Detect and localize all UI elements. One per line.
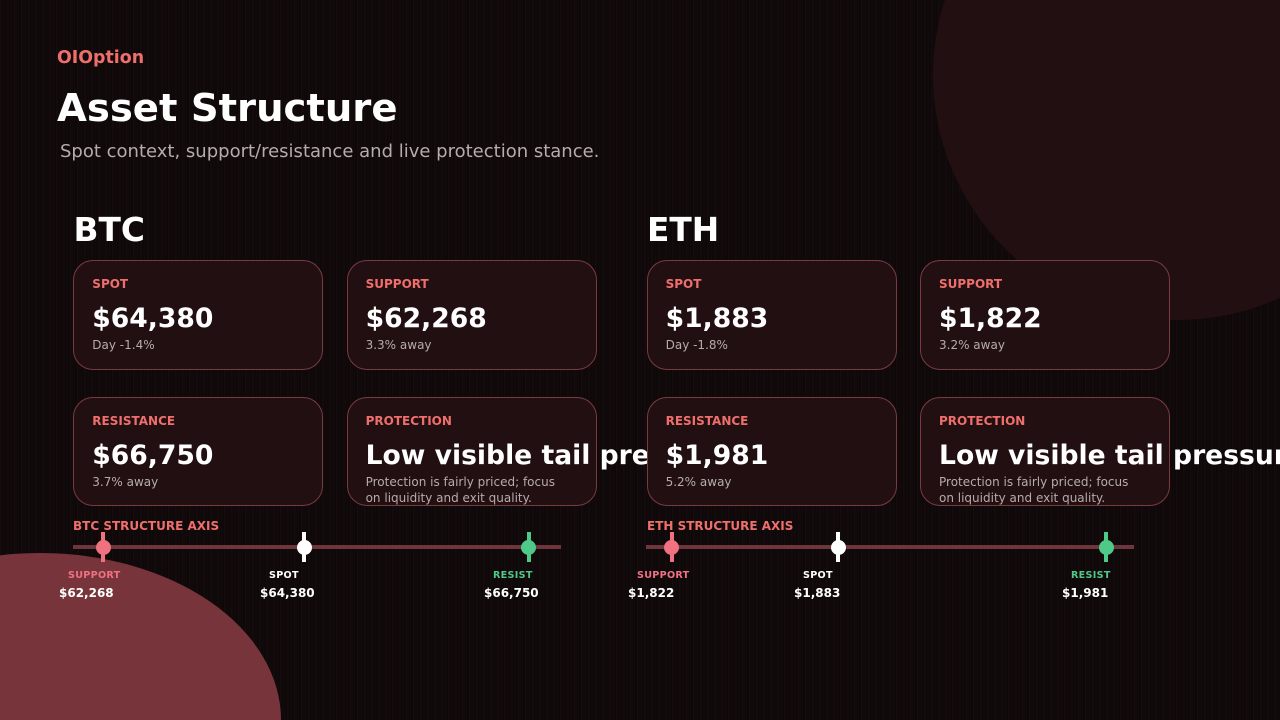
card: ETH protection: PROTECTION — [939, 414, 1025, 428]
card: BTC resistance: 3.7% away — [92, 475, 158, 489]
label: resist: RESIST — [493, 570, 533, 581]
card: ETH resistance: $1,981 — [666, 440, 768, 471]
marker: spot — [831, 532, 846, 562]
card: BTC spot — [73, 260, 323, 370]
card: ETH resistance: RESISTANCE — [666, 414, 748, 428]
brand label: OIOption — [57, 48, 144, 68]
subtitle: Spot context, support/resistance and live protection stance. — [60, 141, 599, 162]
card: ETH spot: Day -1.8% — [666, 338, 728, 352]
card: BTC protection: PROTECTION — [366, 414, 452, 428]
card: ETH spot: $1,883 — [666, 303, 768, 334]
value: resist: $66,750 — [484, 586, 539, 600]
title: Asset Structure — [57, 86, 398, 131]
decorative circle: top right — [933, 0, 1280, 320]
label: spot: SPOT — [803, 570, 833, 581]
heading: ETH: ETH — [647, 211, 719, 249]
value: spot: $1,883 — [794, 586, 840, 600]
marker: spot — [297, 532, 312, 562]
heading: BTC: BTC — [74, 211, 145, 249]
card: BTC spot: SPOT — [92, 277, 128, 291]
card: ETH spot: SPOT — [666, 277, 701, 291]
BTC structure axis — [59, 519, 561, 600]
marker: resist — [521, 532, 536, 562]
card: BTC resistance: RESISTANCE — [92, 414, 175, 428]
value: spot: $64,380 — [260, 586, 315, 600]
value: support: $62,268 — [59, 586, 114, 600]
card: BTC support: $62,268 — [366, 303, 487, 334]
marker: resist — [1099, 532, 1114, 562]
label: resist: RESIST — [1071, 570, 1111, 581]
card: ETH protection — [920, 397, 1170, 506]
axis title: BTC STRUCTURE AXIS — [73, 519, 219, 533]
card: BTC spot: $64,380 — [92, 303, 213, 334]
label: spot: SPOT — [269, 570, 299, 581]
card: ETH spot — [647, 260, 897, 370]
card: ETH support: $1,822 — [939, 303, 1042, 334]
card: BTC protection — [347, 397, 597, 506]
marker: support — [96, 532, 111, 562]
card: ETH support — [920, 260, 1170, 370]
card: BTC spot: Day -1.4% — [92, 338, 155, 352]
card: BTC resistance: $66,750 — [92, 440, 213, 471]
axis track — [646, 545, 1134, 549]
card: ETH resistance — [647, 397, 897, 506]
card: BTC protection: Protection is fairly priced; focus — [366, 475, 555, 489]
card: ETH protection: Protection is fairly priced; focus — [939, 475, 1128, 489]
card: ETH support: SUPPORT — [939, 277, 1002, 291]
card: BTC support: 3.3% away — [366, 338, 432, 352]
axis track — [73, 545, 561, 549]
card: ETH support: 3.2% away — [939, 338, 1005, 352]
value: resist: $1,981 — [1062, 586, 1108, 600]
marker: support — [664, 532, 679, 562]
label: support: SUPPORT — [637, 570, 690, 581]
decorative shape: bottom left — [0, 553, 281, 720]
label: support: SUPPORT — [68, 570, 121, 581]
card: BTC protection: Low visible tail pressure — [366, 440, 732, 471]
card: ETH protection: on liquidity and exit quality. — [939, 491, 1105, 505]
card: BTC resistance — [73, 397, 323, 506]
axis title: ETH STRUCTURE AXIS — [647, 519, 793, 533]
card: BTC protection: on liquidity and exit quality. — [366, 491, 532, 505]
card: BTC support: SUPPORT — [366, 277, 429, 291]
value: support: $1,822 — [628, 586, 674, 600]
card: BTC support — [347, 260, 597, 370]
card: ETH resistance: 5.2% away — [666, 475, 732, 489]
